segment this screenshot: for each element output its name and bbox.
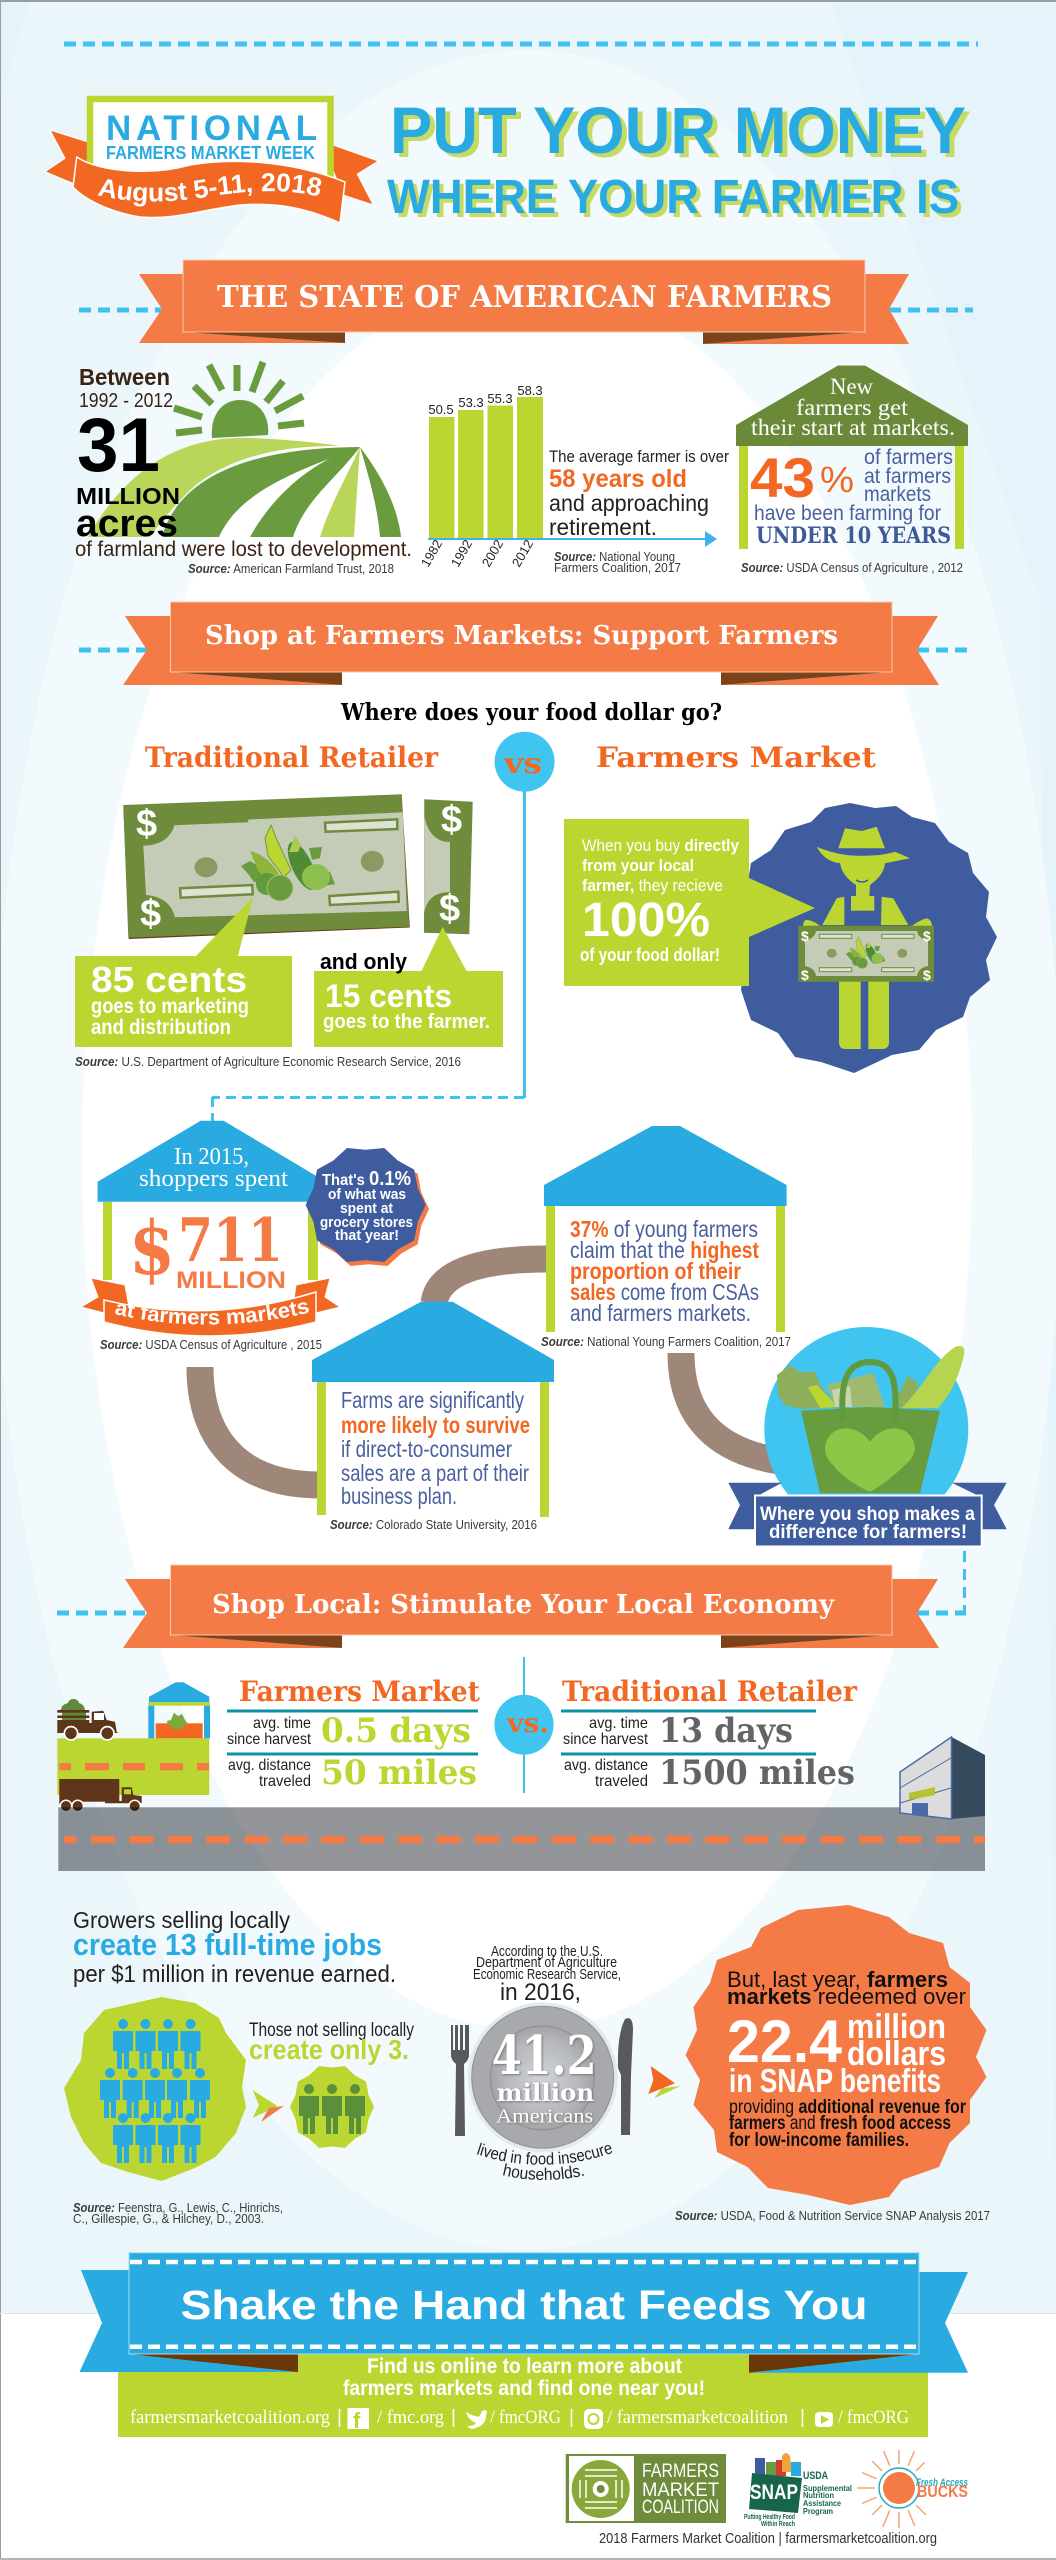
callout: 100 percent: from your local — [582, 856, 694, 875]
market stand: new farmers: of farmers — [864, 446, 953, 469]
badge: 0.1 percent: grocery stores — [320, 1214, 413, 1231]
text: average farmer age — [549, 447, 729, 575]
food insecurity statistic: Economic Research Service, — [473, 1966, 621, 1983]
bar chart: average farmer age — [418, 383, 717, 570]
food insecurity statistic: Department of Agriculture — [476, 1954, 617, 1971]
SNAP statistic: Source: USDA, Food & Nutrition Service SNAP Analysis 2017 — [675, 2208, 990, 2223]
callout: 15 cents: 15 cents — [325, 978, 452, 1014]
comparison: Traditional Retailer: avg. time — [589, 1715, 648, 1732]
source: USDA ERS: Source: U.S. Department of Agriculture Economic Research Service, 2016 — [75, 1054, 461, 1069]
comparison: Farmers Market: 50 miles — [321, 1753, 477, 1793]
icon: farm and sun — [88, 362, 401, 537]
illustration: farmer holding dollar: $ — [923, 928, 931, 944]
jobs statistic — [64, 1907, 414, 2226]
badge: 0.1 percent: of what was — [328, 1186, 406, 1203]
panel: find us online: Find us online to learn more about — [367, 2355, 682, 2378]
SNAP statistic — [675, 1905, 990, 2223]
comparison: Farmers Market: avg. distance — [228, 1757, 311, 1774]
market stand: $711 million: 711 — [178, 1206, 283, 1276]
callout: 85 cents — [75, 897, 292, 1047]
callout: 100 percent: of your food dollar! — [580, 945, 720, 965]
icon: plate — [468, 2002, 618, 2152]
market stand: more likely to survive — [312, 1302, 554, 1532]
logo: SNAP — [744, 2453, 852, 2528]
logo: SNAP: Assistance — [803, 2499, 841, 2508]
social links: | — [337, 2407, 342, 2428]
logo: SNAP: SNAP — [750, 2481, 798, 2504]
icon: grocery store — [900, 1737, 985, 1819]
banner: Shop at Farmers Markets — [123, 602, 939, 685]
logo: Farmers Market Coalition — [566, 2454, 726, 2523]
logo: SNAP: Putting Healthy Food — [744, 2514, 795, 2521]
logo: Fresh Access Bucks — [857, 2450, 968, 2528]
bar chart: average farmer age: 1992 — [448, 537, 475, 570]
illustration: torn dollar bill: $ — [441, 799, 462, 841]
ribbon: at farmers markets: at farmers markets — [115, 1302, 309, 1325]
jobs statistic: Those not selling locally — [249, 2020, 414, 2041]
social links: / fmcORG — [838, 2407, 909, 2428]
social links: | — [451, 2407, 456, 2428]
jobs statistic: create 13 full-time jobs — [73, 1927, 382, 1962]
arrow — [648, 2066, 681, 2098]
heading: Farmers Market: Farmers Market — [596, 741, 876, 774]
comparison: Traditional Retailer: avg. distance — [564, 1757, 648, 1774]
market stand: 37 percent of young farmers — [541, 1126, 791, 1349]
market stand: $711 million — [80, 1120, 339, 1352]
icon: small market stand — [148, 1682, 210, 1738]
market stand: more likely to survive: if direct-to-consumer — [341, 1436, 512, 1462]
bar chart: average farmer age: 53.3 — [458, 395, 484, 410]
callout: 85 cents: goes to marketing — [91, 995, 249, 1018]
market stand: new farmers: have been farming for — [754, 502, 941, 525]
jobs statistic: create only 3. — [249, 2034, 409, 2065]
market stand: $711 million: $ — [129, 1206, 175, 1292]
icon: pickup truck — [57, 1699, 118, 1741]
vs badge — [494, 1657, 554, 1793]
blob: 3 jobs — [290, 2066, 374, 2148]
banner: Shop Local — [123, 1565, 939, 1648]
comparison: Traditional Retailer: 13 days — [659, 1711, 793, 1751]
SNAP statistic: But, last year, farmers — [727, 1967, 948, 1992]
illustration: farmer holding dollar: $ — [801, 967, 809, 983]
banner: Shake the Hand that Feeds You: Shake the Hand that Feeds You — [180, 2282, 868, 2328]
illustration: local road and market stand — [57, 1682, 985, 1871]
banner: The State of American Farmers: THE STATE OF AMERICAN FARMERS — [217, 280, 832, 315]
market stand: new farmers: 43 — [750, 446, 815, 509]
market stand: new farmers: at farmers — [864, 465, 951, 488]
social links — [130, 2407, 909, 2433]
text: average farmer age: 58 years old — [549, 465, 687, 493]
comparison: Traditional Retailer: 1500 miles — [659, 1753, 855, 1793]
badge: 0.1 percent: spent at — [340, 1200, 393, 1217]
logo: Farmers Market Coalition: FARMERS — [642, 2461, 719, 2482]
illustration: torn dollar bill: $ — [140, 893, 161, 935]
SNAP statistic: for low-income families. — [729, 2130, 909, 2151]
market stand: new farmers: New — [830, 374, 873, 399]
market stand: new farmers — [736, 366, 968, 575]
market stand: more likely to survive: Source: Colorado State University, 2016 — [330, 1517, 537, 1532]
callout: 15 cents — [314, 927, 503, 1047]
market stand: new farmers: % — [820, 459, 854, 500]
comparison: Traditional Retailer: traveled — [595, 1773, 648, 1790]
market stand: 37 percent of young farmers: sales come from CSAs — [570, 1279, 759, 1305]
food insecurity statistic: lived in food insecure — [477, 2142, 612, 2165]
food insecurity statistic: households. — [503, 2163, 584, 2180]
panel: find us online — [118, 2354, 928, 2437]
market stand: more likely to survive: sales are a part of their — [341, 1460, 529, 1486]
heading: Where does your food dollar go: Where does your food dollar go? — [340, 699, 722, 726]
ribbon: at farmers markets — [80, 1278, 339, 1336]
logo: National Farmers Market Week — [44, 96, 379, 224]
farmland statistic: Source: American Farmland Trust, 2018 — [188, 561, 394, 576]
arrow — [428, 531, 717, 547]
callout: 100 percent: farmer, they recieve — [582, 876, 723, 895]
banner: The State of American Farmers — [139, 260, 909, 344]
heading: Traditional Retailer: Traditional Retailer — [145, 741, 439, 774]
bar chart: average farmer age: 50.5 — [428, 402, 454, 417]
logo: National Farmers Market Week: NATIONAL — [106, 109, 317, 148]
callout: 15 cents: and only — [320, 949, 408, 974]
text: average farmer age: and approaching — [549, 490, 709, 516]
comparison: Farmers Market: since harvest — [227, 1731, 311, 1748]
market stand: more likely to survive: Farms are significantly — [341, 1387, 524, 1413]
illustration: torn dollar bill: $ — [136, 803, 157, 845]
SNAP statistic: providing additional revenue for — [729, 2097, 967, 2118]
jobs statistic: Source: Feenstra, G., Lewis, C., Hinrichs, — [73, 2200, 283, 2215]
blob: 13 jobs — [64, 1997, 246, 2181]
farmland statistic — [75, 362, 412, 576]
market stand: new farmers: UNDER 10 YEARS — [756, 523, 951, 549]
text: average farmer age: retirement. — [549, 514, 657, 540]
comparison: Farmers Market — [227, 1675, 480, 1793]
banner: Shop at Farmers Markets: Shop at Farmers Markets: Support Farmers — [205, 621, 838, 651]
social links: / fmc.org — [377, 2407, 444, 2428]
text: average farmer age: The average farmer is over — [549, 447, 729, 466]
jobs statistic: per $1 million in revenue earned. — [73, 1961, 396, 1988]
comparison: Farmers Market: avg. time — [253, 1715, 311, 1732]
badge: 0.1 percent — [306, 1148, 429, 1266]
vs badge — [495, 732, 555, 792]
market stand: $711 million: MILLION — [176, 1267, 286, 1294]
bar chart: average farmer age: 2012 — [509, 537, 536, 570]
logo: SNAP: Supplemental — [803, 2484, 852, 2493]
icon: plate: million — [497, 2078, 594, 2107]
banner: Shop Local: Shop Local: Stimulate Your Local Economy — [212, 1590, 835, 1620]
badge: 0.1 percent: that year! — [335, 1227, 399, 1244]
SNAP statistic: 22.4 — [727, 2008, 843, 2075]
banner: Shake the Hand that Feeds You — [80, 2253, 968, 2373]
connector line — [212, 780, 524, 1121]
market stand: more likely to survive: more likely to survive — [341, 1412, 530, 1438]
social links: / fmcORG — [490, 2407, 561, 2428]
bar chart: average farmer age: 55.3 — [487, 391, 513, 406]
icon: plate: Americans — [496, 2107, 593, 2128]
social links: | — [569, 2407, 574, 2428]
market stand: $711 million: In 2015, — [174, 1144, 249, 1170]
food insecurity statistic — [451, 1943, 633, 2180]
logo: Fresh Access Bucks: Fresh Access — [916, 2477, 968, 2489]
SNAP statistic: in SNAP benefits — [729, 2062, 941, 2099]
comparison: Traditional Retailer: since harvest — [563, 1731, 649, 1748]
callout: 85 cents: 85 cents — [91, 959, 247, 1000]
ribbon: where you shop: difference for farmers! — [769, 1522, 967, 1543]
bar chart: average farmer age: 58.3 — [517, 383, 543, 398]
illustration: torn dollar bill: $ — [439, 888, 460, 930]
illustration: farmer holding dollar — [741, 803, 997, 1073]
social links: / farmersmarketcoalition — [607, 2407, 788, 2428]
callout: 100 percent: When you buy directly — [582, 836, 739, 855]
SNAP statistic: dollars — [847, 2035, 946, 2073]
jobs statistic: Growers selling locally — [73, 1907, 290, 1933]
market stand: new farmers: their start at markets. — [751, 415, 955, 440]
market stand: 37 percent of young farmers: claim that the highest — [570, 1237, 759, 1263]
callout: 15 cents: goes to the farmer. — [323, 1011, 490, 1033]
logo: SNAP: Program — [803, 2507, 833, 2516]
market stand: new farmers: farmers get — [796, 395, 909, 420]
bar chart: average farmer age: 1982 — [418, 537, 445, 570]
logo: National Farmers Market Week: August 5-11, 2018 — [98, 173, 322, 206]
market stand: new farmers: Source: USDA Census of Agriculture , 2012 — [741, 560, 963, 575]
connector arcs — [200, 1259, 822, 1485]
market stand: 37 percent of young farmers: 37% of young farmers — [570, 1216, 758, 1242]
comparison: Farmers Market: Farmers Market — [239, 1675, 480, 1708]
SNAP statistic: farmers and fresh food access — [729, 2113, 951, 2134]
SNAP statistic: million — [847, 2008, 946, 2046]
food insecurity statistic: According to the U.S. — [491, 1943, 603, 1960]
logo: SNAP: Nutrition — [803, 2491, 834, 2500]
panel: find us online: farmers markets and find one near you! — [343, 2377, 705, 2400]
farmland statistic: Between — [79, 364, 170, 390]
logo: National Farmers Market Week: FARMERS MARKET WEEK — [106, 143, 315, 163]
farmland statistic: 31 — [77, 403, 160, 488]
comparison: Farmers Market: traveled — [259, 1773, 311, 1790]
text: average farmer age: Source: National Young — [554, 549, 675, 564]
vs badge: vs — [503, 747, 542, 780]
badge: 0.1 percent: That's 0.1% — [322, 1168, 411, 1190]
comparison: Farmers Market: 0.5 days — [321, 1711, 471, 1751]
icon: plate: 41.2 — [492, 2025, 597, 2087]
logo: Fresh Access Bucks: BUCKS — [917, 2482, 968, 2501]
callout: 100 percent: 100% — [582, 894, 710, 947]
farmland statistic: acres — [76, 503, 178, 545]
vs badge: vs. — [506, 1709, 549, 1739]
market stand: $711 million: shoppers spent — [139, 1166, 288, 1192]
jobs statistic: C., Gillespie, G., & Hilchey, D., 2003. — [73, 2211, 264, 2226]
title: WHERE YOUR FARMER IS — [387, 171, 959, 224]
food insecurity statistic: in 2016, — [500, 1979, 581, 2006]
icon: fork — [451, 2025, 469, 2136]
illustration: torn dollar bill — [123, 794, 473, 939]
illustration: farmer holding dollar: $ — [923, 967, 931, 983]
bar chart: average farmer age: 2002 — [479, 537, 506, 570]
ribbon: where you shop: Where you shop makes a — [760, 1504, 975, 1525]
farmland statistic: 1992 - 2012 — [79, 390, 173, 412]
market stand: $711 million: Source: USDA Census of Agriculture , 2015 — [100, 1337, 322, 1352]
social links: f — [353, 2408, 361, 2433]
title: PUT YOUR MONEY — [390, 93, 966, 167]
SNAP statistic: markets redeemed over — [727, 1984, 966, 2009]
icon: box truck — [59, 1779, 142, 1812]
market stand: more likely to survive: business plan. — [341, 1483, 457, 1509]
comparison: Traditional Retailer — [561, 1675, 858, 1793]
market stand: 37 percent of young farmers: Source: National Young Farmers Coalition, 2017 — [541, 1334, 791, 1349]
logo: SNAP: Within Reach — [761, 2521, 795, 2528]
social links: | — [800, 2407, 805, 2428]
callout: 100 percent — [564, 819, 815, 986]
logo: Farmers Market Coalition: COALITION — [642, 2497, 719, 2518]
ribbon: where you shop — [728, 1483, 1007, 1546]
social links: farmersmarketcoalition.org — [130, 2407, 330, 2428]
farmland statistic: MILLION — [76, 483, 180, 509]
logo: SNAP: USDA — [803, 2470, 828, 2482]
farmland statistic: of farmland were lost to development. — [75, 538, 412, 561]
market stand: 37 percent of young farmers: proportion of their — [570, 1258, 741, 1284]
logo: Farmers Market Coalition: MARKET — [642, 2480, 719, 2501]
illustration: farmer holding dollar: $ — [801, 928, 809, 944]
icon: knife — [618, 2018, 633, 2135]
arrow — [252, 2090, 284, 2122]
text: average farmer age: Farmers Coalition, 2017 — [554, 560, 681, 575]
comparison: Traditional Retailer: Traditional Retailer — [562, 1675, 858, 1708]
market stand: 37 percent of young farmers: and farmers markets. — [570, 1300, 751, 1326]
title — [387, 93, 966, 224]
market stand: new farmers: markets — [864, 483, 931, 506]
illustration: shopping bag — [764, 1327, 968, 1531]
callout: 85 cents: and distribution — [91, 1016, 231, 1039]
footer credit: 2018 Farmers Market Coalition | farmersmarketcoalition.org — [599, 2530, 937, 2547]
